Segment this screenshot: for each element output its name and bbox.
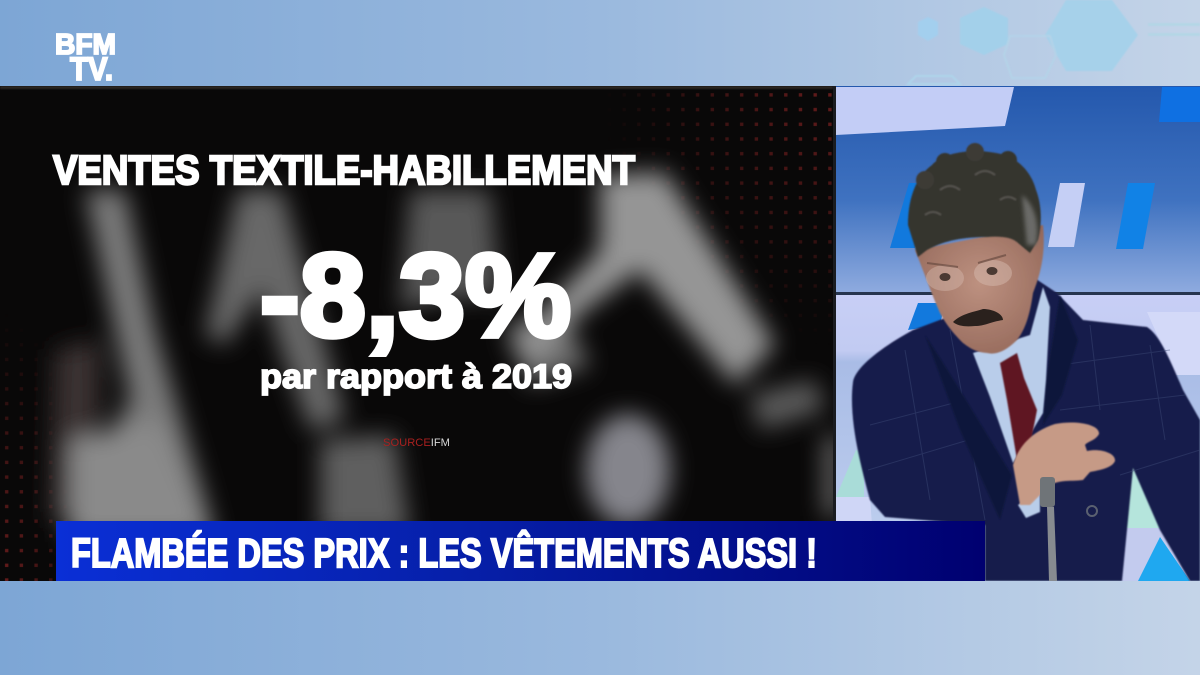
presenter: pointing hand <box>1013 422 1115 505</box>
presenter: moustache <box>953 309 1003 326</box>
key figure: -8,3%: -8,3% <box>260 230 571 362</box>
hexagon decoration <box>908 0 1200 84</box>
panel: studio presenter <box>833 86 1200 581</box>
logo: BFM TV <box>55 29 116 87</box>
heading: ventes textile-habillement: VENTES TEXTILE-HABILLEMENT <box>53 147 635 193</box>
logo: BFM TV: BFM <box>55 29 116 61</box>
subtitle: par rapport à 2019: par rapport à 2019 <box>260 358 572 396</box>
presenter: jacket button <box>1087 506 1097 516</box>
presenter: jacket plaid <box>868 325 1200 520</box>
presenter: lapel shadow <box>925 295 1078 520</box>
presenter: grey temple <box>1022 195 1037 245</box>
presenter: hair <box>908 143 1041 257</box>
presenter: microphone <box>1040 477 1057 581</box>
presenter: face <box>915 225 1044 354</box>
presenter: shirt <box>973 287 1050 463</box>
headline banner: FLAMBÉE DES PRIX : LES VÊTEMENTS AUSSI ! <box>71 530 817 576</box>
presenter: shirt cuff <box>1018 490 1040 518</box>
panel: dark blurred video background <box>0 86 838 581</box>
presenter: glasses and eyes <box>926 255 1012 291</box>
presenter: tie <box>1000 353 1037 460</box>
presenter: jacket body <box>852 277 1200 581</box>
studio backdrop <box>833 86 1200 581</box>
logo: BFM TV: TV. <box>70 51 113 87</box>
source line: SOURCEIFM <box>383 437 450 449</box>
